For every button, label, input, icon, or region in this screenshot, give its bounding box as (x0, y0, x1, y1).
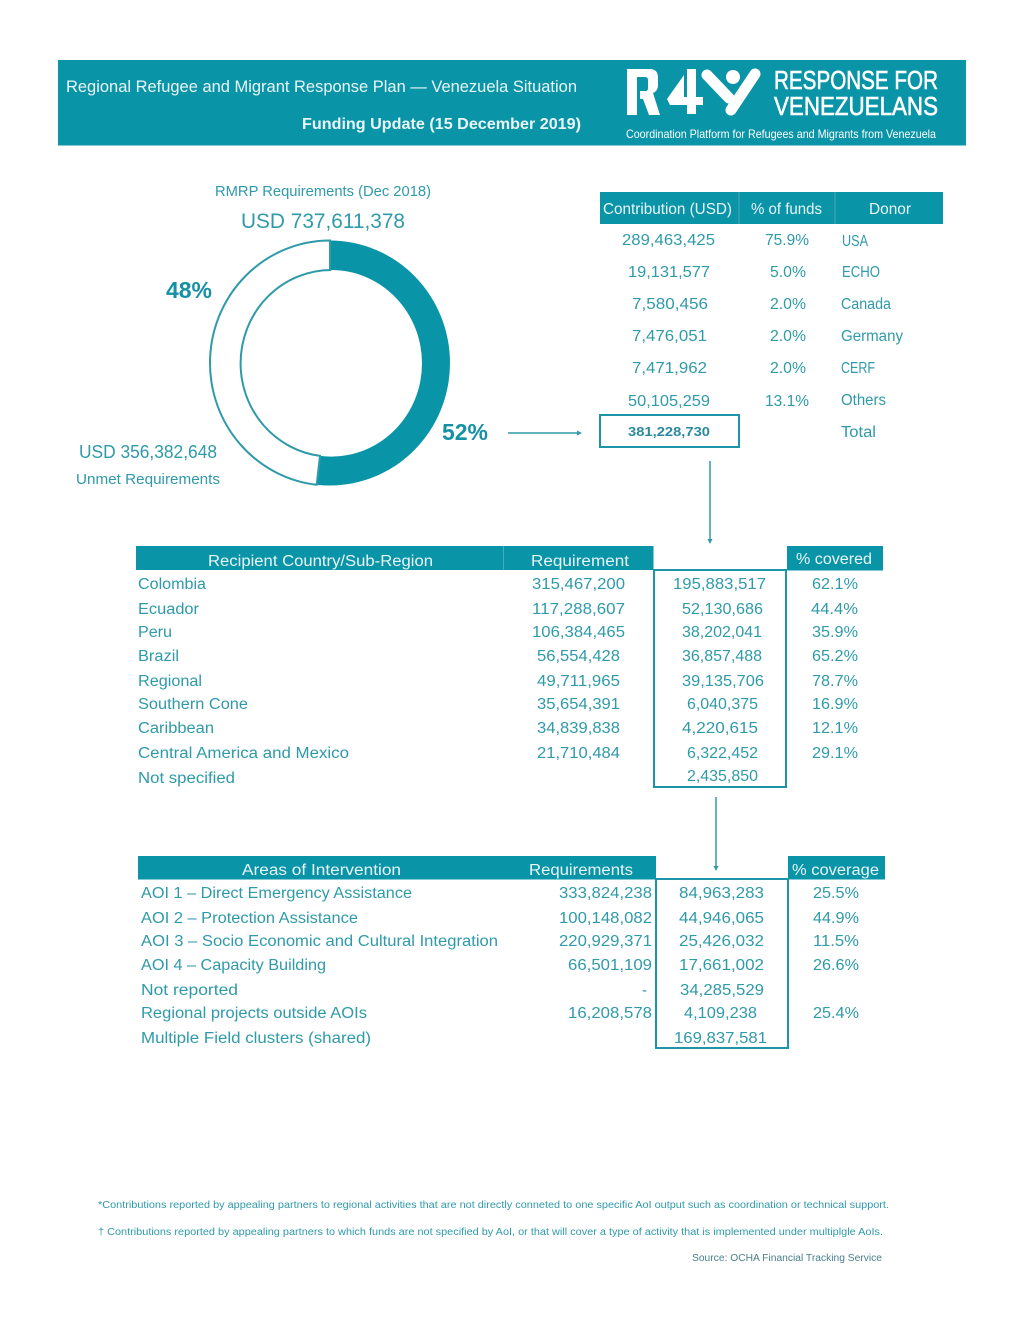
donor names column (841, 233, 903, 441)
table: recipient countries (136, 546, 883, 787)
total contributions box (600, 415, 739, 447)
country requirements: 106,384,465 (532, 624, 625, 641)
52% funded label: 52% (442, 419, 488, 445)
donor contribution amounts: 7,476,051 (632, 328, 707, 345)
country table header: % covered (796, 551, 872, 568)
logo wordmark (774, 65, 938, 121)
intervention table header: % coverage (792, 862, 879, 879)
intervention names: Multiple Field clusters (shared) (141, 1030, 371, 1047)
donor contribution amounts: 289,463,425 (622, 232, 715, 249)
country requirements: 315,467,200 (532, 576, 625, 593)
donor contribution amounts: 7,580,456 (632, 296, 708, 313)
donor table header: Contribution (USD) (603, 201, 732, 218)
country percent covered: 44.4% (811, 601, 858, 618)
country funded amounts: 52,130,686 (682, 601, 763, 618)
donor table header: % of funds (751, 201, 822, 218)
source note: Source: OCHA Financial Tracking Service (692, 1253, 882, 1264)
country percent covered: 29.1% (812, 745, 858, 762)
percent of funds column: 2.0% (770, 360, 806, 377)
intervention percent coverage: 26.6% (813, 957, 859, 974)
donut chart: funded vs unmet (210, 240, 450, 486)
country table header: Requirement (531, 553, 630, 570)
intervention table header (138, 856, 885, 880)
donor contribution amounts: 19,131,577 (628, 264, 710, 281)
percent of funds column: 2.0% (770, 296, 806, 313)
arrow: total to country table (708, 461, 712, 544)
total contributions box: 381,228,730 (628, 424, 710, 439)
intervention requirements: 220,929,371 (559, 933, 652, 950)
icon: R4V logo (627, 69, 755, 115)
country funded amounts box (654, 570, 786, 787)
donor names column: CERF (841, 360, 875, 377)
intervention percent coverage: 25.5% (813, 885, 859, 902)
country names: Caribbean (138, 720, 214, 737)
intervention names (141, 885, 498, 1047)
intervention funded amounts (674, 885, 767, 1047)
arrow: country table to intervention table (714, 797, 718, 871)
country funded amounts: 36,857,488 (682, 648, 762, 665)
country requirements: 35,654,391 (537, 696, 620, 713)
total requirements amount: USD 737,611,378 (241, 210, 405, 233)
country requirements: 34,839,838 (537, 720, 620, 737)
country table header: Recipient Country/Sub-Region (208, 553, 433, 570)
logo tagline: Coordination Platform for Refugees and Migrants from Venezuela (626, 127, 936, 141)
country percent covered: 78.7% (812, 673, 858, 690)
country funded amounts: 4,220,615 (682, 720, 758, 737)
intervention requirements: - (642, 982, 647, 999)
footnote: regional contributions: *Contributions reported by appealing partners to regional activities that are not directly conneted to one specific AoI output such as coordination or technical support. (98, 1200, 889, 1211)
country percent covered: 16.9% (812, 696, 858, 713)
intervention requirements: 66,501,109 (568, 957, 652, 974)
country percent covered: 65.2% (812, 648, 858, 665)
country requirements: 117,288,607 (532, 601, 625, 618)
country funded amounts: 38,202,041 (682, 624, 762, 641)
intervention names: AOI 4 – Capacity Building (141, 957, 326, 974)
donor names column: Canada (841, 296, 891, 313)
intervention names: Regional projects outside AOIs (141, 1005, 367, 1022)
country names: Peru (138, 624, 172, 641)
logo wordmark: RESPONSE FOR (774, 65, 938, 95)
intervention percent coverage: 44.9% (813, 910, 859, 927)
country names: Central America and Mexico (138, 745, 349, 762)
country requirements: 49,711,965 (537, 673, 620, 690)
country funded amounts: 2,435,850 (687, 768, 758, 785)
intervention requirements: 333,824,238 (559, 885, 652, 902)
country funded amounts: 39,135,706 (682, 673, 764, 690)
donor table header (600, 192, 943, 224)
title: Regional Refugee and Migrant Response Plan — Venezuela Situation (66, 78, 577, 96)
intervention names: Not reported (141, 982, 238, 999)
intervention funded amounts: 34,285,529 (680, 982, 764, 999)
intervention table header: Requirements (529, 862, 633, 879)
country names: Not specified (138, 770, 235, 787)
country percent covered: 12.1% (812, 720, 858, 737)
country names: Southern Cone (138, 696, 248, 713)
percent of funds column: 2.0% (770, 328, 806, 345)
intervention percent coverage: 11.5% (813, 933, 859, 950)
country names: Brazil (138, 648, 179, 665)
intervention percent coverage (813, 885, 859, 1022)
percent of funds column: 5.0% (770, 264, 806, 281)
country requirements: 21,710,484 (537, 745, 620, 762)
intervention funded amounts: 4,109,238 (684, 1005, 757, 1022)
country table header (136, 546, 883, 570)
intervention funded amounts: 25,426,032 (679, 933, 764, 950)
table: donors (600, 192, 943, 447)
donor table header: Donor (869, 201, 911, 218)
intervention requirements: 16,208,578 (568, 1005, 652, 1022)
intervention table header: Areas of Intervention (242, 862, 401, 879)
percent of funds column (765, 232, 809, 410)
footnote: unspecified contributions: † Contributions reported by appealing partners to which funds are not specified by AoI, or that will cover a type of activity that is implemented under multiplgle AoIs. (98, 1227, 883, 1238)
country requirements (532, 576, 625, 762)
intervention funded amounts box (656, 879, 788, 1048)
country names: Regional (138, 673, 202, 690)
unmet requirements amount: USD 356,382,648 (79, 442, 217, 462)
subtitle: funding update date: Funding Update (15 December 2019) (302, 116, 581, 133)
percent of funds column: 75.9% (765, 232, 809, 249)
intervention percent coverage: 25.4% (813, 1005, 859, 1022)
intervention names: AOI 3 – Socio Economic and Cultural Integration (141, 933, 498, 950)
country percent covered (811, 576, 858, 762)
header banner (58, 60, 966, 146)
donor names column: Total (841, 424, 876, 441)
donor contribution amounts (622, 232, 715, 410)
country percent covered: 35.9% (812, 624, 858, 641)
intervention funded amounts: 84,963,283 (679, 885, 764, 902)
intervention requirements: 100,148,082 (559, 910, 652, 927)
country names: Colombia (138, 576, 206, 593)
intervention names: AOI 1 – Direct Emergency Assistance (141, 885, 412, 902)
country requirements: 56,554,428 (537, 648, 620, 665)
arrow: to contributions total (508, 430, 582, 436)
48% unfunded label: 48% (166, 277, 212, 303)
country names (138, 576, 349, 787)
intervention funded amounts: 169,837,581 (674, 1030, 767, 1047)
donor names column: Others (841, 392, 886, 409)
country funded amounts: 6,040,375 (687, 696, 758, 713)
donor names column: USA (842, 233, 869, 250)
country percent covered: 62.1% (812, 576, 858, 593)
country funded amounts (673, 576, 766, 785)
intervention names: AOI 2 – Protection Assistance (141, 910, 358, 927)
logo wordmark: VENEZUELANS (774, 91, 938, 121)
RMRP requirements label: RMRP Requirements (Dec 2018) (215, 184, 431, 200)
country funded amounts: 6,322,452 (687, 745, 758, 762)
table: areas of intervention (138, 856, 885, 1048)
country names: Ecuador (138, 601, 199, 618)
unmet requirements label: Unmet Requirements (76, 472, 220, 488)
intervention requirements (559, 885, 652, 1022)
donor names column: ECHO (842, 264, 880, 281)
intervention funded amounts: 17,661,002 (679, 957, 764, 974)
intervention funded amounts: 44,946,065 (679, 910, 764, 927)
donor contribution amounts: 50,105,259 (628, 393, 710, 410)
country funded amounts: 195,883,517 (673, 576, 766, 593)
donor contribution amounts: 7,471,962 (632, 360, 707, 377)
percent of funds column: 13.1% (765, 393, 809, 410)
donor names column: Germany (841, 328, 903, 345)
